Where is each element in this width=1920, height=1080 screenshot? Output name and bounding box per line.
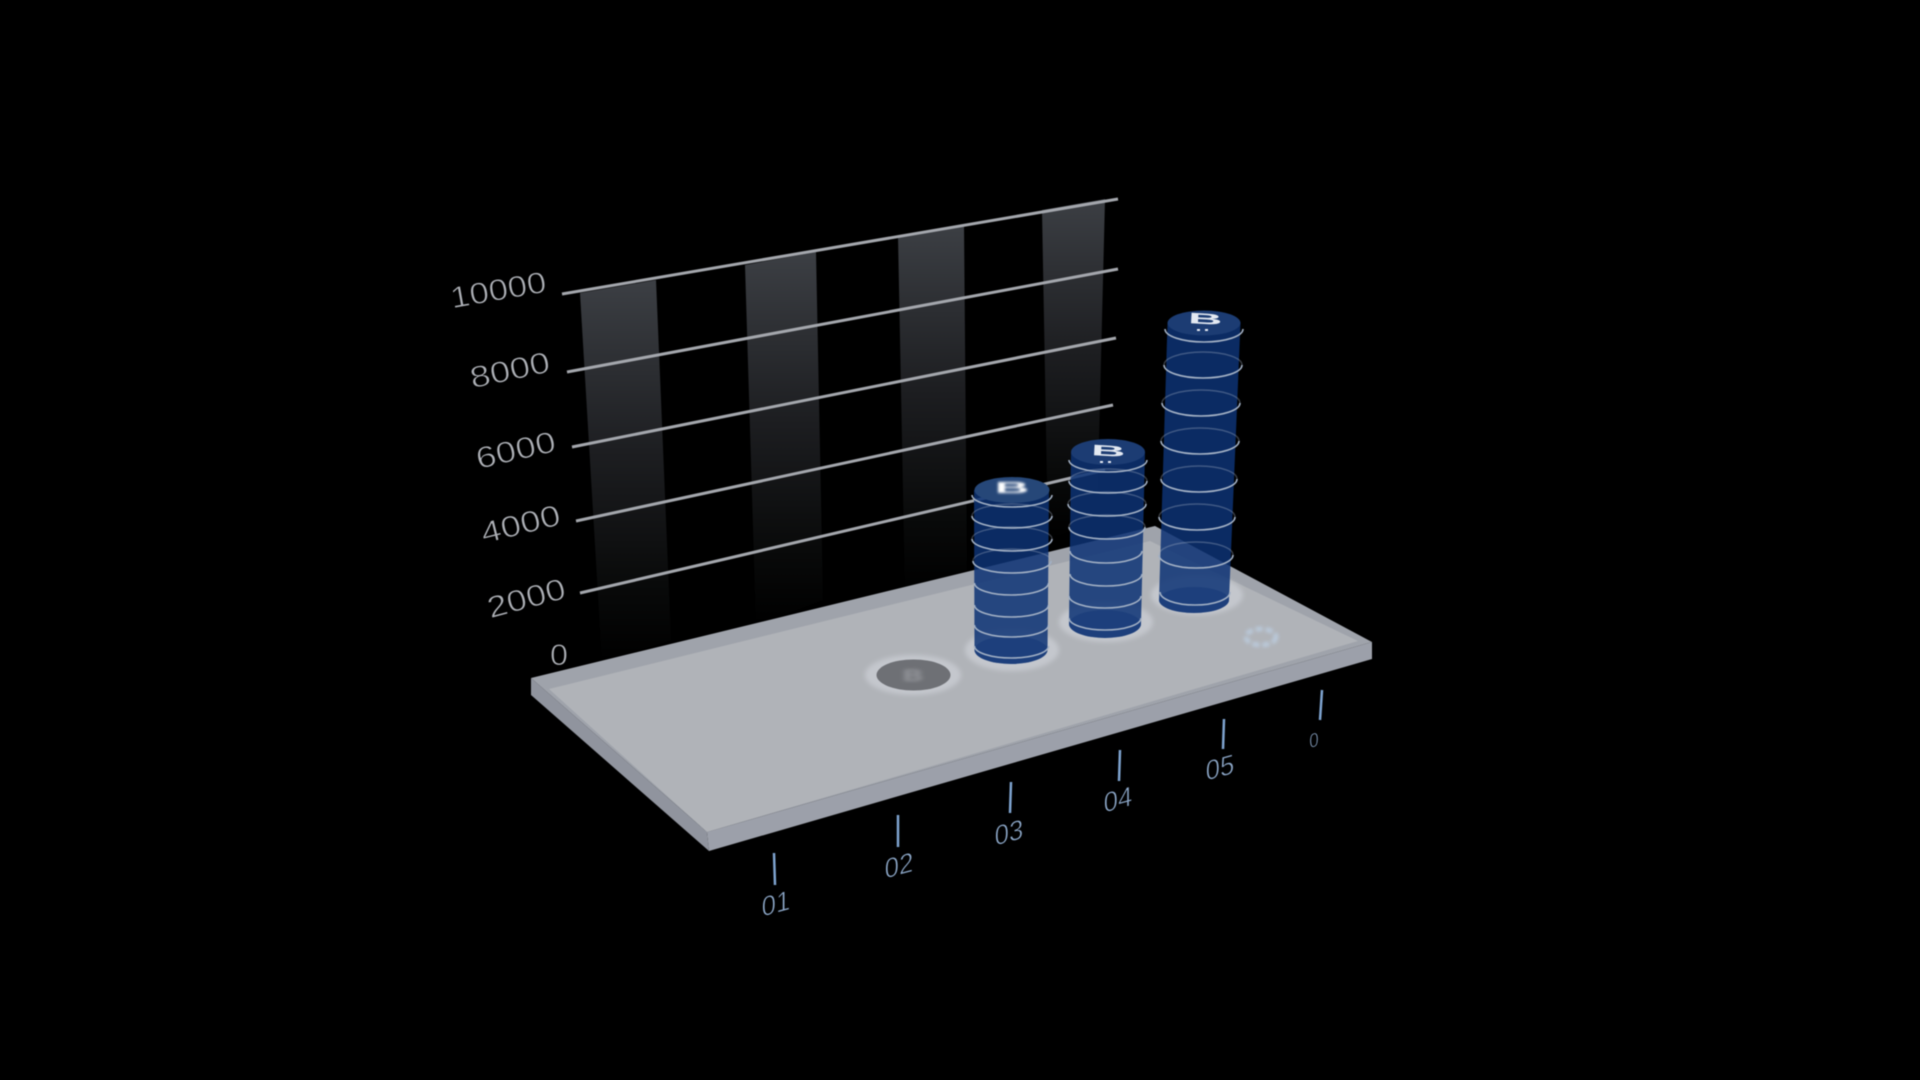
stack 03: B xyxy=(995,480,1029,496)
stack 03 xyxy=(965,477,1059,671)
stack 05: B xyxy=(1188,310,1223,328)
x axis ticks xyxy=(774,690,1322,885)
x axis labels: 02 xyxy=(885,846,913,885)
x axis labels: 04 xyxy=(1104,780,1132,819)
y axis labels: 0 xyxy=(550,639,568,672)
y axis labels xyxy=(448,266,569,672)
y axis labels: 2000 xyxy=(484,573,569,625)
x axis labels xyxy=(762,728,1319,923)
stack 04: B xyxy=(1091,442,1126,460)
base plate xyxy=(531,526,1372,851)
y axis labels: 4000 xyxy=(477,499,564,551)
y axis labels: 10000 xyxy=(448,266,549,315)
x axis labels: 0 xyxy=(1309,728,1319,752)
stack 05 xyxy=(1151,310,1243,615)
faded coin icon on plate xyxy=(1246,629,1276,645)
y axis labels: 8000 xyxy=(467,346,553,395)
x axis labels: 05 xyxy=(1206,748,1234,787)
empty slot: gray coin at position 02: B xyxy=(903,665,923,685)
empty slot: gray coin at position 02 xyxy=(865,655,961,695)
x axis labels: 01 xyxy=(762,884,790,923)
y axis labels: 6000 xyxy=(473,426,559,476)
horizontal grid lines xyxy=(562,199,1118,593)
background column bands xyxy=(580,199,1105,662)
stack 04 xyxy=(1059,439,1153,642)
x axis labels: 03 xyxy=(995,813,1023,852)
